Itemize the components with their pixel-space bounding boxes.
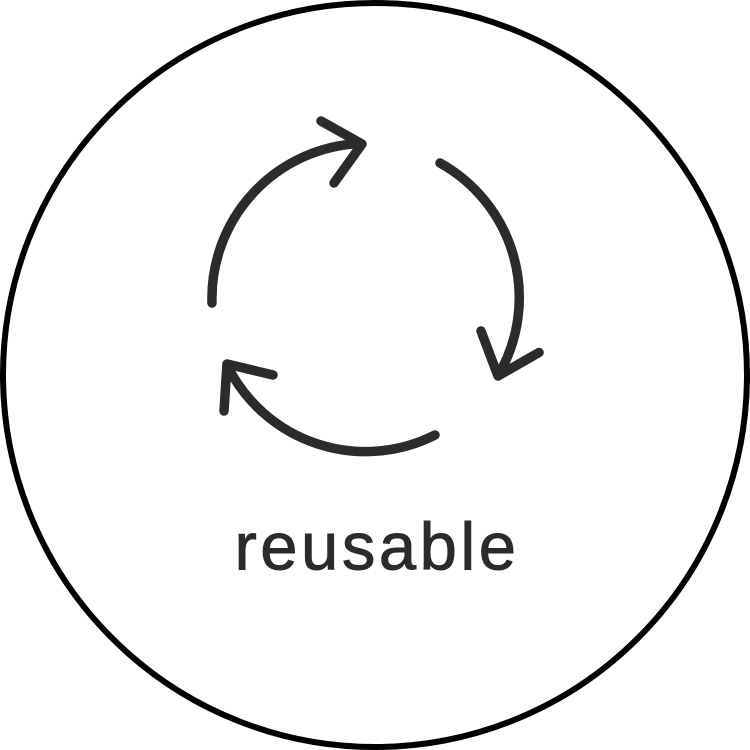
arrow: right [440,163,539,376]
arrow: top left [212,121,362,303]
arrow: bottom [224,364,435,452]
icon: circular arrows [212,121,539,452]
label: reusable: reusable [234,510,520,584]
